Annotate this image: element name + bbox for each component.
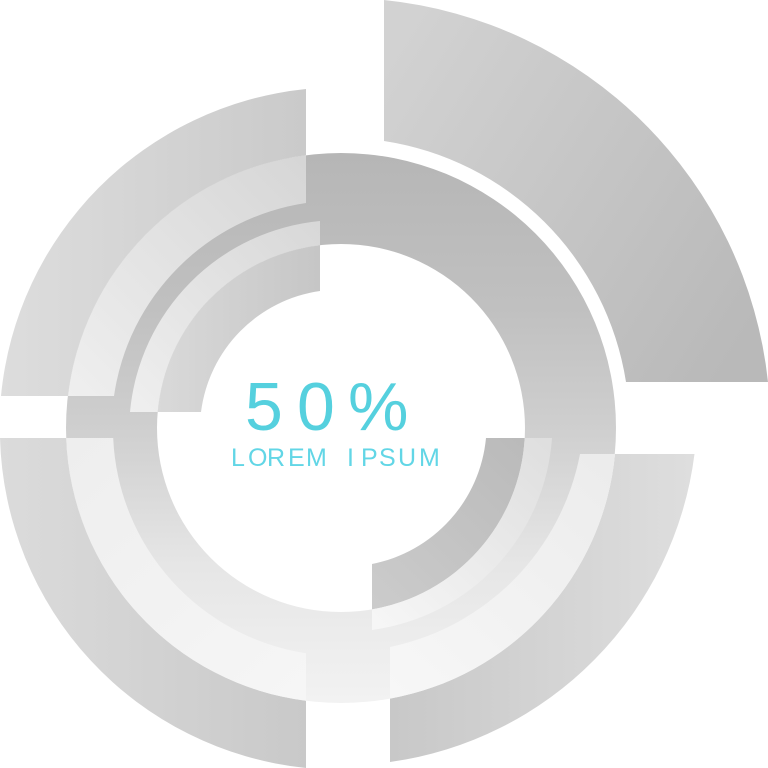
bottom-left sector ring overlap <box>66 438 306 701</box>
bottom-right sector ring overlap <box>390 454 615 699</box>
percentage value: 50% <box>245 369 408 445</box>
bottom-right sector <box>390 454 694 762</box>
caption: LOREMIPSUM <box>231 444 440 472</box>
inner bottom-right arc light band <box>372 438 552 630</box>
inner top-left arc grey band <box>158 245 320 412</box>
top-right sector <box>384 0 768 382</box>
top-left sector ring overlap <box>68 155 306 396</box>
bottom-left sector <box>0 438 306 768</box>
top-left sector outer band <box>1 89 306 396</box>
bottom-left sector outer band <box>0 438 306 768</box>
inner top-left arc <box>130 221 320 412</box>
inner top-left arc light band <box>130 221 320 412</box>
inner bottom-right arc grey band <box>372 438 525 609</box>
inner bottom-right arc <box>372 438 552 630</box>
central ring <box>66 153 616 703</box>
top-left sector <box>1 89 306 396</box>
bottom-right sector outer band <box>390 454 694 762</box>
